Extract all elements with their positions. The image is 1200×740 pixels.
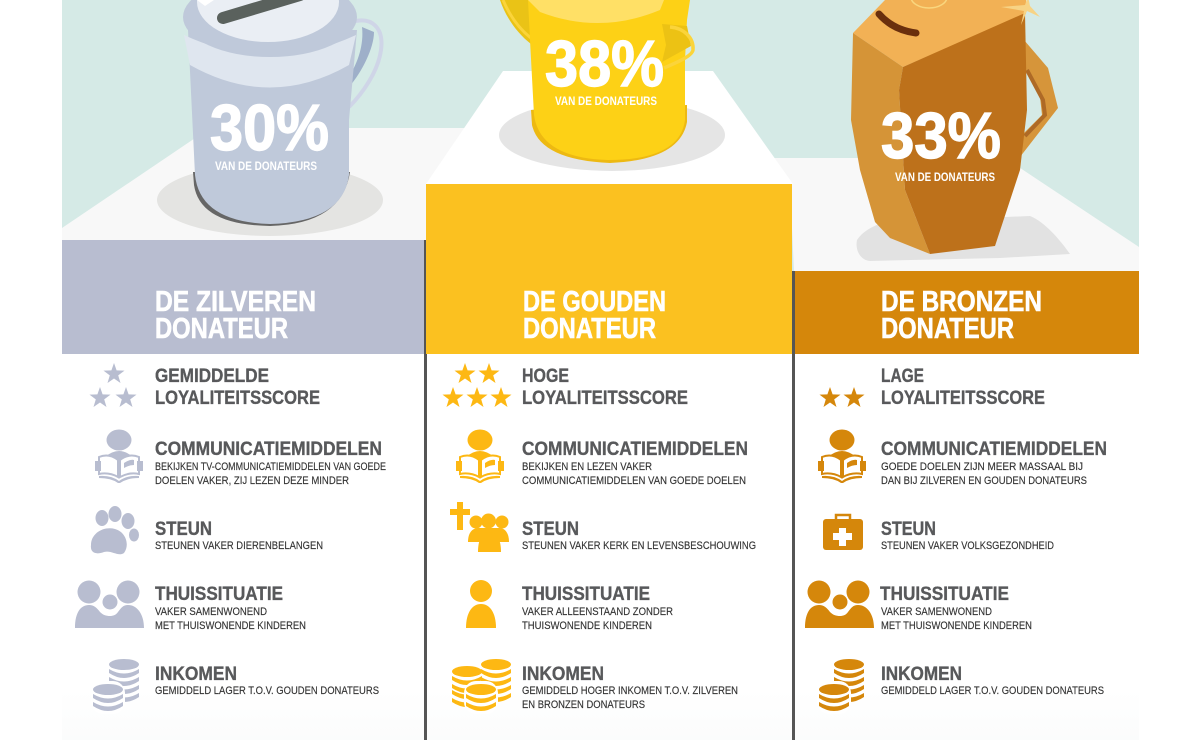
bronze percentage: 33% bbox=[881, 99, 1001, 172]
silver communication text: DOELEN VAKER, ZIJ LEZEN DEZE MINDER bbox=[155, 475, 349, 487]
bronze income text: GEMIDDELD LAGER T.O.V. GOUDEN DONATEURS bbox=[881, 685, 1104, 697]
bronze communication text bbox=[881, 439, 1107, 487]
icon: gold coins bbox=[452, 659, 511, 714]
gold home text: VAKER ALLEENSTAAND ZONDER bbox=[522, 606, 673, 618]
icon: first aid case bbox=[823, 515, 863, 550]
silver loyalty text bbox=[155, 366, 320, 409]
silver support text bbox=[155, 519, 323, 552]
gold header band: DONATEUR bbox=[523, 313, 656, 345]
gold percentage: 38% bbox=[545, 27, 664, 100]
silver home text: THUISSITUATIE bbox=[155, 584, 283, 605]
silver home text: MET THUISWONENDE KINDEREN bbox=[155, 620, 306, 632]
background wall bbox=[62, 0, 1139, 272]
bronze floor bbox=[773, 158, 1139, 272]
gold income text: EN BRONZEN DONATEURS bbox=[522, 699, 645, 711]
silver percentage caption: VAN DE DONATEURS bbox=[215, 159, 317, 173]
silver communication text bbox=[155, 439, 386, 487]
bronze home text: MET THUISWONENDE KINDEREN bbox=[881, 620, 1032, 632]
gold income text: INKOMEN bbox=[522, 664, 604, 685]
gold loyalty text bbox=[522, 366, 688, 409]
bronze communication text: COMMUNICATIEMIDDELEN bbox=[881, 439, 1107, 460]
bronze support text bbox=[881, 519, 1054, 552]
icon: gold reader bbox=[456, 430, 504, 483]
bronze home text: THUISSITUATIE bbox=[880, 584, 1009, 605]
icon: paw bbox=[91, 506, 139, 554]
gold income text: GEMIDDELD HOGER INKOMEN T.O.V. ZILVEREN bbox=[522, 685, 738, 697]
bronze income text: INKOMEN bbox=[881, 664, 962, 685]
silver support text: STEUNEN VAKER DIERENBELANGEN bbox=[155, 540, 323, 552]
silver home text: VAKER SAMENWONEND bbox=[155, 606, 267, 618]
panel: bronze donor bbox=[795, 271, 1139, 714]
icon: bronze reader bbox=[818, 430, 866, 483]
bronze loyalty text: LOYALITEITSSCORE bbox=[881, 388, 1045, 409]
bronze loyalty text: LAGE bbox=[881, 366, 924, 387]
gold collection mug bbox=[499, 0, 725, 171]
icon: bronze family bbox=[805, 580, 874, 628]
gold communication text: BEKIJKEN EN LEZEN VAKER bbox=[522, 461, 652, 473]
gold home text: THUISSITUATIE bbox=[522, 584, 650, 605]
panel: gold donor bbox=[426, 184, 792, 714]
gold communication text: COMMUNICATIEMIDDELEN VAN GOEDE DOELEN bbox=[522, 475, 746, 487]
gold support text bbox=[522, 519, 756, 552]
icon: cross and congregation bbox=[450, 502, 509, 552]
gold loyalty text: HOGE bbox=[522, 366, 569, 387]
gold income text bbox=[522, 664, 738, 711]
silver header band bbox=[62, 240, 424, 354]
icon: silver reader bbox=[95, 430, 143, 483]
gold home text bbox=[522, 584, 673, 632]
bronze home text bbox=[880, 584, 1032, 632]
silver header band: DE ZILVEREN bbox=[155, 286, 316, 318]
gold podium top bbox=[426, 71, 793, 184]
bronze header band bbox=[795, 271, 1139, 354]
gold header band: DE GOUDEN bbox=[523, 286, 666, 318]
bronze loyalty text bbox=[881, 366, 1045, 409]
bronze header band: DONATEUR bbox=[881, 313, 1014, 345]
silver loyalty text: GEMIDDELDE bbox=[155, 366, 269, 387]
silver header band: DONATEUR bbox=[155, 313, 288, 345]
silver loyalty text: LOYALITEITSSCORE bbox=[155, 388, 320, 409]
gold support text: STEUNEN VAKER KERK EN LEVENSBESCHOUWING bbox=[522, 540, 756, 552]
icon: bronze coins bbox=[817, 659, 864, 714]
silver support text: STEUN bbox=[155, 519, 212, 540]
bronze header band: DE BRONZEN bbox=[881, 286, 1042, 318]
gold home text: THUISWONENDE KINDEREN bbox=[522, 620, 652, 632]
icon: single person bbox=[466, 580, 496, 628]
bronze communication text: GOEDE DOELEN ZIJN MEER MASSAAL BIJ bbox=[881, 461, 1083, 473]
bronze support text: STEUNEN VAKER VOLKSGEZONDHEID bbox=[881, 540, 1054, 552]
silver percentage: 30% bbox=[210, 91, 329, 164]
bronze support text: STEUN bbox=[881, 519, 936, 540]
gold header band bbox=[426, 184, 792, 354]
panel: silver donor bbox=[62, 240, 424, 714]
gold support text: STEUN bbox=[522, 519, 579, 540]
silver collection mug bbox=[157, 0, 383, 236]
icon: silver stars bbox=[90, 363, 136, 407]
icon: gold stars bbox=[442, 363, 512, 407]
bronze home text: VAKER SAMENWONEND bbox=[881, 606, 992, 618]
bronze income text bbox=[881, 664, 1104, 697]
gold percentage caption: VAN DE DONATEURS bbox=[555, 94, 657, 108]
gold communication text: COMMUNICATIEMIDDELEN bbox=[522, 439, 748, 460]
silver communication text: BEKIJKEN TV-COMMUNICATIEMIDDELEN VAN GOEDE bbox=[155, 461, 386, 473]
bronze collection mug bbox=[851, 0, 1070, 261]
bronze communication text: DAN BIJ ZILVEREN EN GOUDEN DONATEURS bbox=[881, 475, 1087, 487]
silver income text: GEMIDDELD LAGER T.O.V. GOUDEN DONATEURS bbox=[155, 685, 379, 697]
icon: silver family bbox=[75, 580, 144, 628]
gold loyalty text: LOYALITEITSSCORE bbox=[522, 388, 688, 409]
bronze percentage caption: VAN DE DONATEURS bbox=[895, 170, 995, 184]
icon: bronze stars bbox=[820, 387, 864, 407]
gold communication text bbox=[522, 439, 748, 487]
icon: silver coins bbox=[91, 659, 139, 714]
silver income text bbox=[155, 664, 379, 697]
silver floor bbox=[62, 128, 510, 240]
silver communication text: COMMUNICATIEMIDDELEN bbox=[155, 439, 382, 460]
silver home text bbox=[155, 584, 306, 632]
silver income text: INKOMEN bbox=[155, 664, 237, 685]
